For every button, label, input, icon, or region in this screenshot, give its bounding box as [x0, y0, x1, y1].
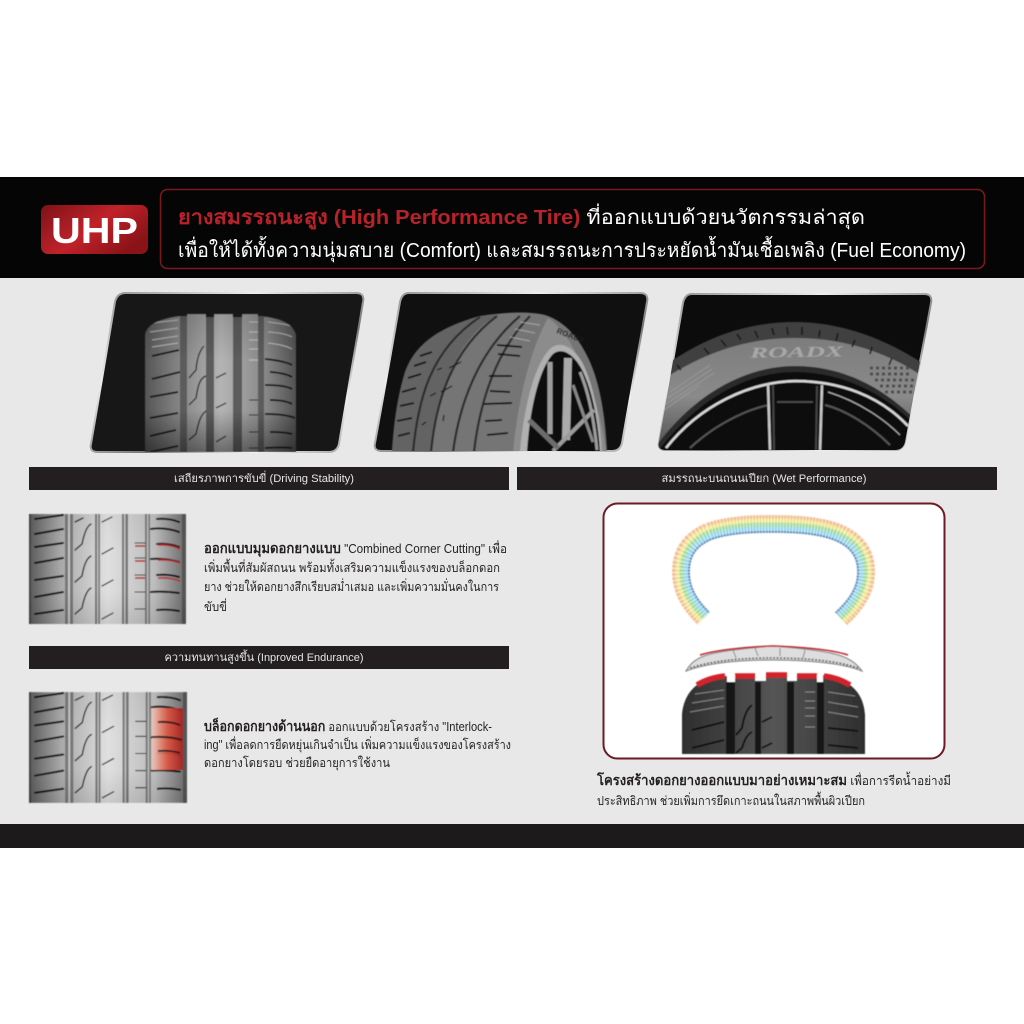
dark tread with red contact band — [682, 674, 865, 754]
checker pattern — [870, 368, 916, 392]
UHP badge — [41, 205, 148, 254]
description: corner cutting: เพิ่มพื้นที่สัมผัสถนน พร้อมทั้งเสริมความแข็งแรงของบล็อกดอก — [204, 558, 500, 575]
description: interlocking block: ดอกยางโดยรอบ ช่วยยืดอายุการใช้งาน — [204, 755, 390, 771]
header outlined box — [160, 190, 984, 268]
tread profile section — [686, 646, 862, 671]
section bar: wet performance: สมรรถนะบนถนนเปียก (Wet Performance) — [662, 472, 866, 485]
UHP badge: UHP — [51, 210, 138, 251]
description: corner cutting: ออกแบบมุมดอกยางแบบ "Combined Corner Cutting" เพื่อ — [204, 540, 507, 557]
panel: wet performance diagram — [604, 504, 944, 758]
tread image: corner cutting — [29, 514, 186, 624]
rim outer ring — [666, 381, 908, 448]
section bar: improved endurance — [29, 646, 509, 669]
panel: tire tread front view — [91, 293, 363, 452]
sidewall brand: ROADX — [555, 326, 586, 345]
rim spokes — [768, 383, 822, 450]
description: interlocking block: ing" เพื่อลดการยืดหยุ่นเกินจำเป็น เพิ่มความแข็งแรงของโครงสร้าง — [204, 736, 511, 753]
headline line 1: ยางสมรรถนะสูง (High Performance Tire) ที่ออกแบบด้วยนวัตกรรมล่าสุด — [178, 203, 865, 231]
footer band — [0, 824, 1024, 848]
description: corner cutting: ขับขี่ — [204, 598, 227, 614]
description: interlocking block: บล็อกดอกยางด้านนอก ออกแบบด้วยโครงสร้าง "Interlock- — [204, 717, 492, 734]
page background — [0, 278, 1024, 824]
sidewall brand: ROADX — [748, 344, 845, 362]
description: corner cutting — [204, 540, 507, 614]
description: interlocking block — [204, 717, 511, 771]
tread image: interlocking block — [29, 692, 187, 803]
description: corner cutting: ยาง ช่วยให้ดอกยางสึกเรียบสม่ำเสมอ และเพิ่มความมั่นคงในการ — [204, 578, 499, 594]
red block highlight — [152, 708, 183, 770]
headline line 2: เพื่อให้ได้ทั้งความนุ่มสบาย (Comfort) และสมรรถนะการประหยัดน้ำมันเชื้อเพลิง (Fuel Economy) — [178, 236, 966, 263]
section bar: driving stability — [29, 467, 509, 490]
panel: tire angled view — [375, 293, 647, 452]
section bar: driving stability: เสถียรภาพการขับขี่ (Driving Stability) — [174, 470, 354, 485]
panel: sidewall and rim view — [650, 294, 931, 455]
rainbow pressure contour — [690, 533, 857, 612]
section bar: improved endurance: ความทนทานสูงขึ้น (Inproved Endurance) — [164, 649, 364, 664]
section bar: wet performance — [517, 467, 997, 490]
header band — [0, 177, 1024, 278]
red highlights — [135, 545, 180, 581]
description: wet performance — [596, 771, 951, 808]
description: wet performance: ประสิทธิภาพ ช่วยเพิ่มการยึดเกาะถนนในสภาพพื้นผิวเปียก — [597, 791, 865, 808]
description: wet performance: โครงสร้างดอกยางออกแบบมาอย่างเหมาะสม เพื่อการรีดน้ำอย่างมี — [596, 771, 951, 788]
